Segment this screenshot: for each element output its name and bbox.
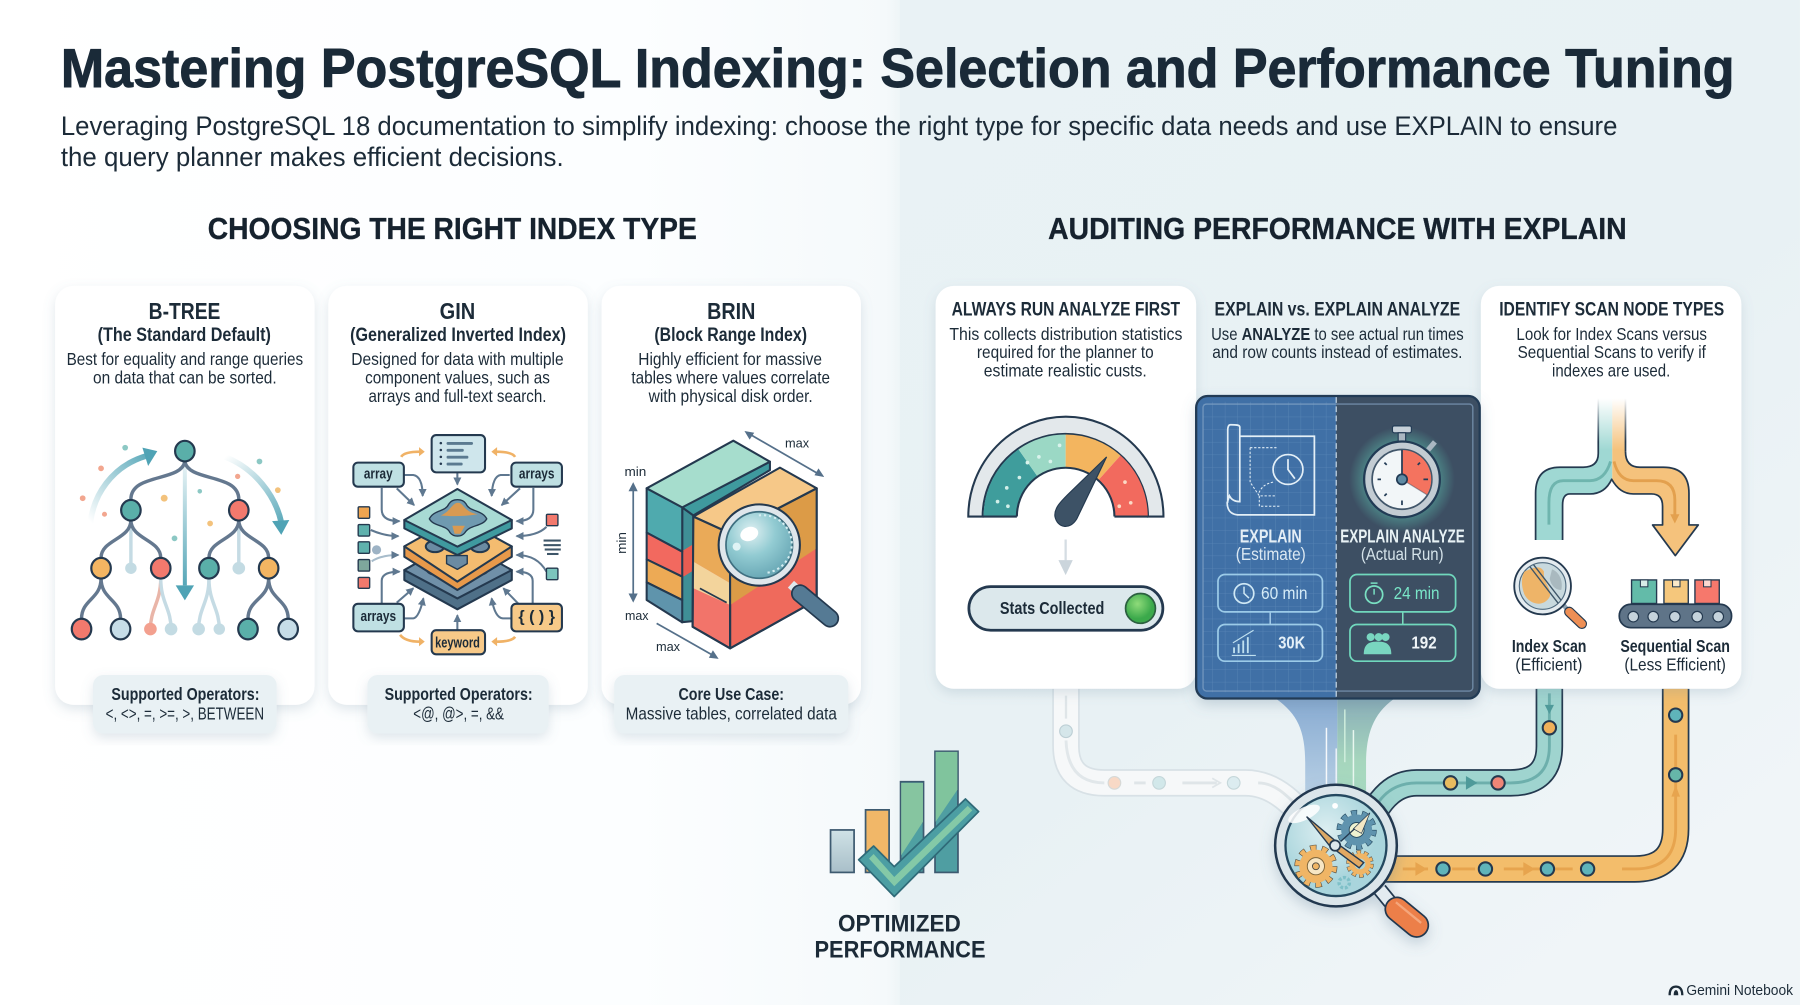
panel: B-tree: on data that can be sorted. bbox=[93, 367, 277, 387]
icon: BRIN block range with magnifier: max bbox=[656, 639, 680, 654]
icon: GIN inverted index diagram: array bbox=[364, 467, 393, 483]
status pill: stats collected bbox=[969, 587, 1163, 630]
icon: GIN inverted index diagram: { ( ) } bbox=[518, 608, 555, 626]
panel: BRIN: tables where values correlate bbox=[631, 367, 830, 387]
panel: GIN: component values, such as bbox=[365, 367, 550, 387]
panel: always run analyze first: ALWAYS RUN ANALYZE FIRST bbox=[952, 300, 1180, 321]
metric: estimated rows bbox=[1218, 624, 1322, 661]
background right bbox=[900, 0, 1800, 1005]
callout: BRIN core use case bbox=[614, 675, 848, 734]
status pill: stats collected: Stats Collected bbox=[1000, 598, 1104, 618]
panel: B-tree: (The Standard Default) bbox=[98, 324, 271, 346]
metric: actual rows bbox=[1350, 624, 1456, 661]
callout: GIN operators: Supported Operators: bbox=[385, 684, 533, 704]
label: optimized performance: PERFORMANCE bbox=[814, 936, 986, 963]
panel: BRIN bbox=[602, 286, 861, 734]
pipeline: faded stats path bbox=[1060, 689, 1304, 817]
icon: BRIN block range with magnifier: max bbox=[785, 436, 809, 451]
label: optimized performance: OPTIMIZED bbox=[838, 911, 961, 938]
panel: B-tree: B-TREE bbox=[149, 298, 220, 324]
panel: BRIN: with physical disk order. bbox=[648, 386, 813, 406]
panel: always run analyze first bbox=[936, 286, 1196, 689]
panel: B-tree bbox=[55, 286, 315, 734]
panel: BRIN: (Block Range Index) bbox=[654, 324, 807, 346]
metric: actual rows: 192 bbox=[1411, 633, 1437, 653]
label: index scan: Index Scan bbox=[1512, 636, 1586, 656]
title: Mastering PostgreSQL Indexing: Selection and Performance Tuning bbox=[61, 38, 1735, 99]
callout: B-tree operators: Supported Operators: bbox=[111, 684, 259, 704]
metric: estimated rows: 30K bbox=[1278, 633, 1305, 653]
label: explain analyze actual run bbox=[1340, 525, 1465, 564]
panel: identify scan node types: Sequential Scans to verify if bbox=[1518, 342, 1706, 362]
panel: GIN: (Generalized Inverted Index) bbox=[350, 324, 566, 346]
metric: actual time bbox=[1350, 575, 1456, 624]
label: sequential scan: Sequential Scan bbox=[1620, 636, 1730, 656]
label: sequential scan: (Less Efficient) bbox=[1624, 654, 1726, 674]
panel: explain vs explain analyze heading: Use ANALYZE to see actual run times bbox=[1211, 324, 1464, 344]
callout: B-tree operators: <, <>, =, >=, >, BETWEEN bbox=[106, 704, 264, 724]
label: optimized performance bbox=[814, 911, 986, 963]
label: index scan bbox=[1512, 636, 1586, 674]
panel: explain vs explain analyze heading: EXPLAIN vs. EXPLAIN ANALYZE bbox=[1215, 300, 1460, 321]
callout: BRIN core use case: Core Use Case: bbox=[678, 684, 784, 704]
metric: estimated time: 60 min bbox=[1261, 583, 1308, 603]
icon: B-tree diagram bbox=[72, 441, 298, 639]
gear: blue bbox=[1339, 813, 1374, 847]
icon: central magnifier with gears bbox=[1275, 785, 1421, 925]
label: explain analyze actual run: EXPLAIN ANALYZE bbox=[1340, 525, 1465, 546]
callout: B-tree operators bbox=[93, 675, 277, 734]
panel: identify scan node types bbox=[1481, 286, 1741, 689]
icon: BRIN block range with magnifier: min bbox=[625, 464, 646, 479]
icon: GIN inverted index diagram: arrays bbox=[519, 467, 554, 483]
label: explain estimate: EXPLAIN bbox=[1240, 525, 1302, 546]
heading: auditing performance with explain: AUDITING PERFORMANCE WITH EXPLAIN bbox=[1048, 212, 1627, 246]
icon: GIN inverted index diagram: keyword bbox=[435, 635, 480, 651]
panel: always run analyze first: This collects distribution statistics bbox=[949, 324, 1182, 344]
icon: gauge bbox=[968, 417, 1163, 526]
label: sequential scan bbox=[1620, 636, 1730, 674]
pipeline: index scan path bbox=[1375, 689, 1556, 810]
panel: explain vs explain analyze heading bbox=[1211, 300, 1464, 362]
stacked index layers bbox=[404, 489, 512, 609]
label: index scan: (Efficient) bbox=[1515, 654, 1582, 674]
icon: sequential scan conveyor bbox=[1619, 580, 1732, 628]
pipeline: sequential scan path bbox=[1372, 689, 1682, 876]
panel: identify scan node types: Look for Index Scans versus bbox=[1516, 324, 1707, 344]
label: explain estimate bbox=[1236, 525, 1306, 564]
panel: explain comparison dashboard bbox=[1196, 396, 1480, 699]
arrow: gauge to stats bbox=[1058, 540, 1073, 575]
background left bbox=[0, 0, 900, 1005]
callout: GIN operators: <@, @>, =, && bbox=[413, 704, 504, 724]
watermark: Gemini Notebook: Gemini Notebook bbox=[1686, 983, 1794, 999]
panel: GIN: Designed for data with multiple bbox=[351, 349, 564, 369]
panel: always run analyze first: required for the planner to bbox=[977, 342, 1154, 362]
subtitle: Leveraging PostgreSQL 18 documentation to simplify indexing: choose the right type for specific data needs and use EXPLAIN to ensure bbox=[61, 111, 1617, 141]
funnel connector bbox=[1277, 699, 1394, 804]
icon: fork arrows bbox=[1536, 398, 1698, 556]
icon: index scan magnifier bbox=[1514, 558, 1582, 624]
icon: BRIN block range with magnifier: max bbox=[625, 608, 649, 623]
panel: GIN: GIN bbox=[440, 298, 475, 324]
callout: GIN operators bbox=[367, 675, 549, 734]
heading: choosing the right index type: CHOOSING THE RIGHT INDEX TYPE bbox=[208, 212, 697, 246]
panel: identify scan node types: indexes are used. bbox=[1552, 361, 1670, 381]
icon: optimized performance chart bbox=[831, 751, 979, 897]
panel: BRIN: Highly efficient for massive bbox=[638, 349, 822, 369]
panel: always run analyze first: estimate realistic custs. bbox=[984, 361, 1147, 381]
icon: GIN inverted index diagram bbox=[353, 435, 562, 654]
panel: BRIN: BRIN bbox=[707, 298, 755, 324]
metric: estimated time bbox=[1218, 575, 1322, 624]
panel: explain vs explain analyze heading: and row counts instead of estimates. bbox=[1212, 342, 1462, 362]
label: explain estimate: (Estimate) bbox=[1236, 544, 1306, 564]
subtitle: the query planner makes efficient decisions. bbox=[61, 142, 564, 172]
gear: small gold bbox=[1348, 852, 1371, 875]
panel: identify scan node types: IDENTIFY SCAN NODE TYPES bbox=[1499, 300, 1724, 321]
icon: blueprint bbox=[1227, 425, 1314, 515]
icon: GIN inverted index diagram: arrays bbox=[360, 609, 396, 625]
panel: GIN: arrays and full-text search. bbox=[369, 386, 546, 406]
icon: BRIN block range with magnifier bbox=[614, 431, 830, 659]
callout: BRIN core use case: Massive tables, correlated data bbox=[626, 704, 837, 724]
icon: stopwatch bbox=[1349, 426, 1455, 532]
panel: B-tree: Best for equality and range queries bbox=[67, 349, 303, 369]
icon: BRIN block range with magnifier: min bbox=[614, 532, 629, 554]
panel: GIN bbox=[328, 286, 588, 734]
subtitle bbox=[61, 111, 1617, 172]
metric: actual time: 24 min bbox=[1394, 583, 1440, 603]
gear: large gold bbox=[1298, 848, 1334, 885]
label: explain analyze actual run: (Actual Run) bbox=[1361, 544, 1444, 564]
